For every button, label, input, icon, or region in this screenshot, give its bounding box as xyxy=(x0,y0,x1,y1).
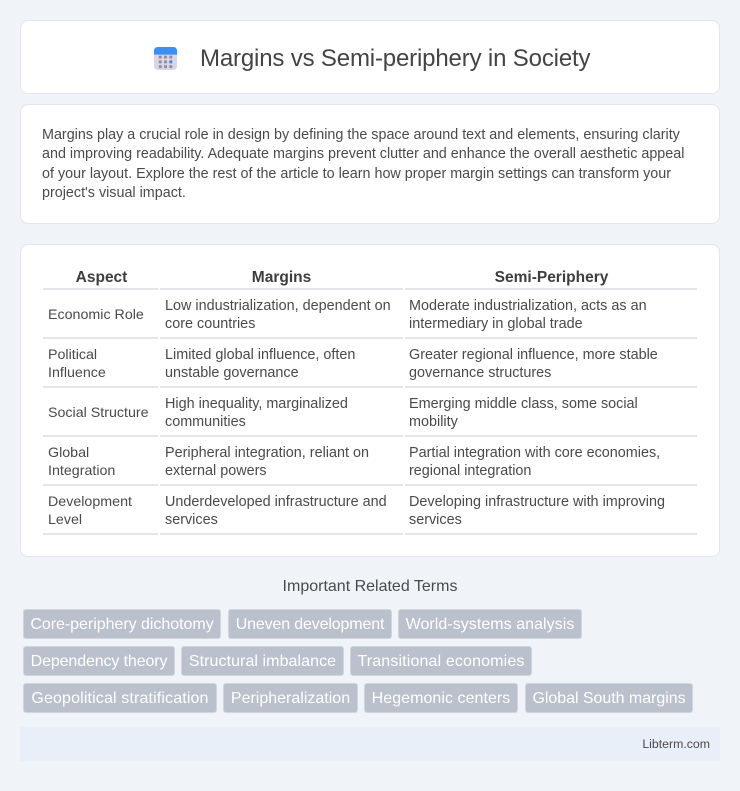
row: Political Influence xyxy=(48,347,658,381)
row: Social Structure: Social Structure xyxy=(48,405,149,421)
row: Development Level xyxy=(48,494,665,528)
row: Political Influence: unstable governance xyxy=(165,365,299,381)
row: Political Influence: Political xyxy=(48,347,97,363)
row: Economic Role: Moderate industrialization, acts as an xyxy=(409,298,647,314)
row: Global Integration: Global xyxy=(48,445,89,461)
intro text: project's visual impact. xyxy=(42,185,186,201)
row: Development Level: Underdeveloped infrastructure and xyxy=(165,494,387,510)
related terms tags: World-systems analysis xyxy=(406,616,574,633)
intro text: of your layout. Explore the rest of the article to learn how proper margin settings can transform your xyxy=(42,166,671,182)
row: Global Integration: regional integration xyxy=(409,463,531,479)
related terms tags: Uneven development xyxy=(236,616,384,633)
related terms heading: Important Related Terms xyxy=(283,578,457,595)
footer credit: Libterm.com xyxy=(642,737,710,751)
row: Development Level: Level xyxy=(48,512,82,528)
row: Political Influence: Greater regional influence, more stable xyxy=(409,347,658,363)
intro panel xyxy=(20,104,720,224)
title: Margins vs Semi-periphery in Society xyxy=(200,45,590,72)
row: Economic Role: Economic Role xyxy=(48,307,144,323)
row: Political Influence: Limited global influence, often xyxy=(165,347,355,363)
related terms tags: Structural imbalance xyxy=(189,653,336,670)
table column headings xyxy=(76,269,608,286)
intro text: Margins play a crucial role in design by defining the space around text and elements, ensuring clarity xyxy=(42,126,680,142)
row: Economic Role: Low industrialization, dependent on xyxy=(165,298,391,314)
table column headings: Margins xyxy=(252,269,311,286)
table column headings: Semi-Periphery xyxy=(495,269,608,286)
row: Global Integration: Peripheral integration, reliant on xyxy=(165,445,369,461)
related terms tags: Global South margins xyxy=(532,690,686,707)
related terms tags: Core-periphery dichotomy xyxy=(30,616,214,633)
row: Social Structure xyxy=(48,396,638,430)
related terms tags: Transitional economies xyxy=(357,653,524,670)
related terms tags: Dependency theory xyxy=(31,653,167,670)
row: Development Level: services xyxy=(165,512,218,528)
related terms tags: Geopolitical stratification xyxy=(31,690,209,707)
row: Social Structure: communities xyxy=(165,414,246,430)
row: Development Level: Developing infrastructure with improving xyxy=(409,494,665,510)
row: Global Integration: Integration xyxy=(48,463,115,479)
header panel xyxy=(20,20,720,94)
related terms tags: Peripheralization xyxy=(231,690,350,707)
intro text xyxy=(42,126,684,201)
row: Global Integration: external powers xyxy=(165,463,267,479)
row: Political Influence: governance structures xyxy=(409,365,551,381)
row: Economic Role: intermediary in global trade xyxy=(409,316,583,332)
intro text: and improving readability. Adequate margins prevent clutter and enhance the overall aesthetic appeal xyxy=(42,146,684,162)
comparison table panel xyxy=(20,244,720,557)
row: Social Structure: High inequality, marginalized xyxy=(165,396,348,412)
related terms tags xyxy=(23,609,693,713)
row: Political Influence: Influence xyxy=(48,365,106,381)
row: Development Level: Development xyxy=(48,494,132,510)
table column headings: Aspect xyxy=(76,269,127,286)
row: Global Integration xyxy=(48,445,660,479)
row: Social Structure: mobility xyxy=(409,414,458,430)
row: Economic Role: core countries xyxy=(165,316,255,332)
row: Global Integration: Partial integration with core economies, xyxy=(409,445,660,461)
footer bar xyxy=(20,727,720,761)
row: Development Level: services xyxy=(409,512,462,528)
icon: calendar xyxy=(154,47,178,70)
related terms tags: Hegemonic centers xyxy=(372,690,510,707)
row: Economic Role xyxy=(48,298,647,332)
row: Social Structure: Emerging middle class, some social xyxy=(409,396,638,412)
